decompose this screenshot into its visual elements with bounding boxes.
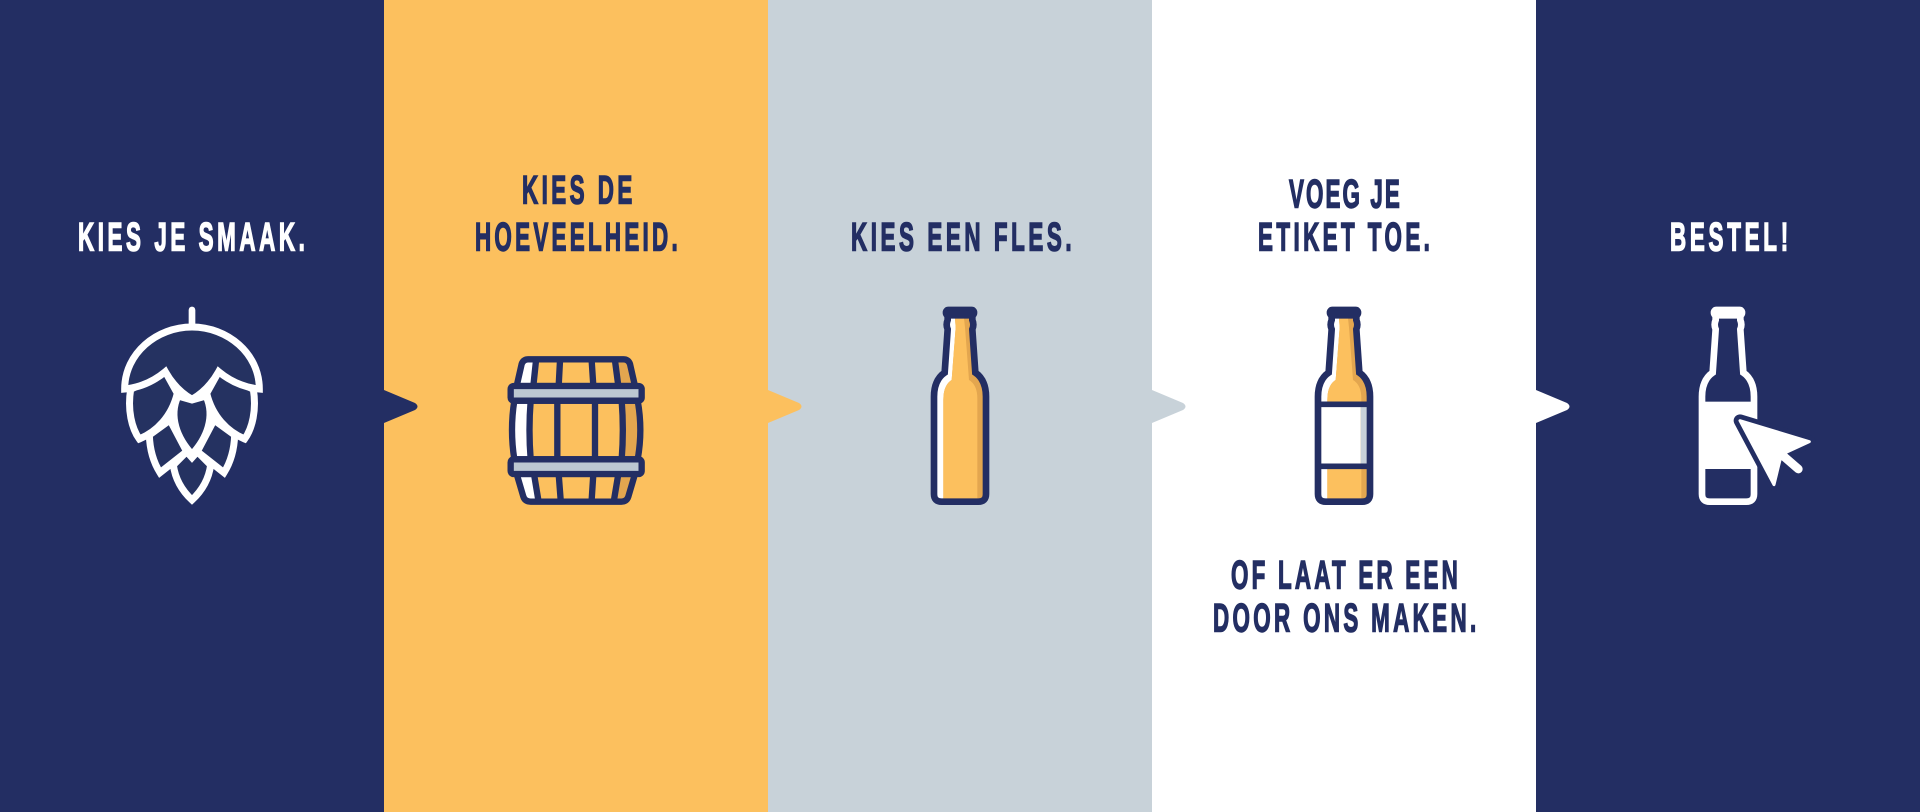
heading: kies je smaak: KIES JE SMAAK. [78, 215, 305, 259]
heading: voeg je etiket toe [1258, 172, 1430, 259]
heading: kies de hoeveelheid: KIES DE [522, 168, 632, 212]
arrow: panel 3 to 4 [1152, 390, 1186, 423]
text: of laat er een door ons maken: DOOR ONS MAKEN. [1213, 596, 1476, 640]
panel: bestel [1671, 222, 1811, 505]
heading: kies de hoeveelheid: HOEVEELHEID. [475, 215, 678, 259]
heading: voeg je etiket toe: ETIKET TOE. [1258, 215, 1430, 259]
icon: cursor [1740, 421, 1809, 485]
heading: kies een fles: KIES EEN FLES. [851, 215, 1072, 259]
panel: kies een fles [768, 0, 1152, 812]
icon: barrel [511, 359, 642, 502]
text: of laat er een door ons maken: OF LAAT ER EEN [1231, 553, 1458, 597]
text: of laat er een door ons maken [1213, 553, 1476, 640]
icon: hop [125, 310, 259, 500]
icon: labelled bottle [1314, 307, 1374, 507]
icon: bottle with white label [1698, 307, 1758, 502]
arrow: panel 4 to 5 [1536, 390, 1570, 423]
panel: kies je smaak [0, 0, 384, 812]
panel: kies de hoeveelheid [384, 0, 768, 812]
icon: filled bottle [930, 307, 990, 507]
arrow: panel 2 to 3 [768, 390, 802, 423]
heading: bestel: BESTEL! [1670, 215, 1788, 259]
arrow: panel 1 to 2 [384, 390, 418, 423]
heading: voeg je etiket toe: VOEG JE [1289, 172, 1400, 216]
panel: voeg je etiket toe [1152, 0, 1536, 812]
heading: kies de hoeveelheid [475, 168, 678, 259]
